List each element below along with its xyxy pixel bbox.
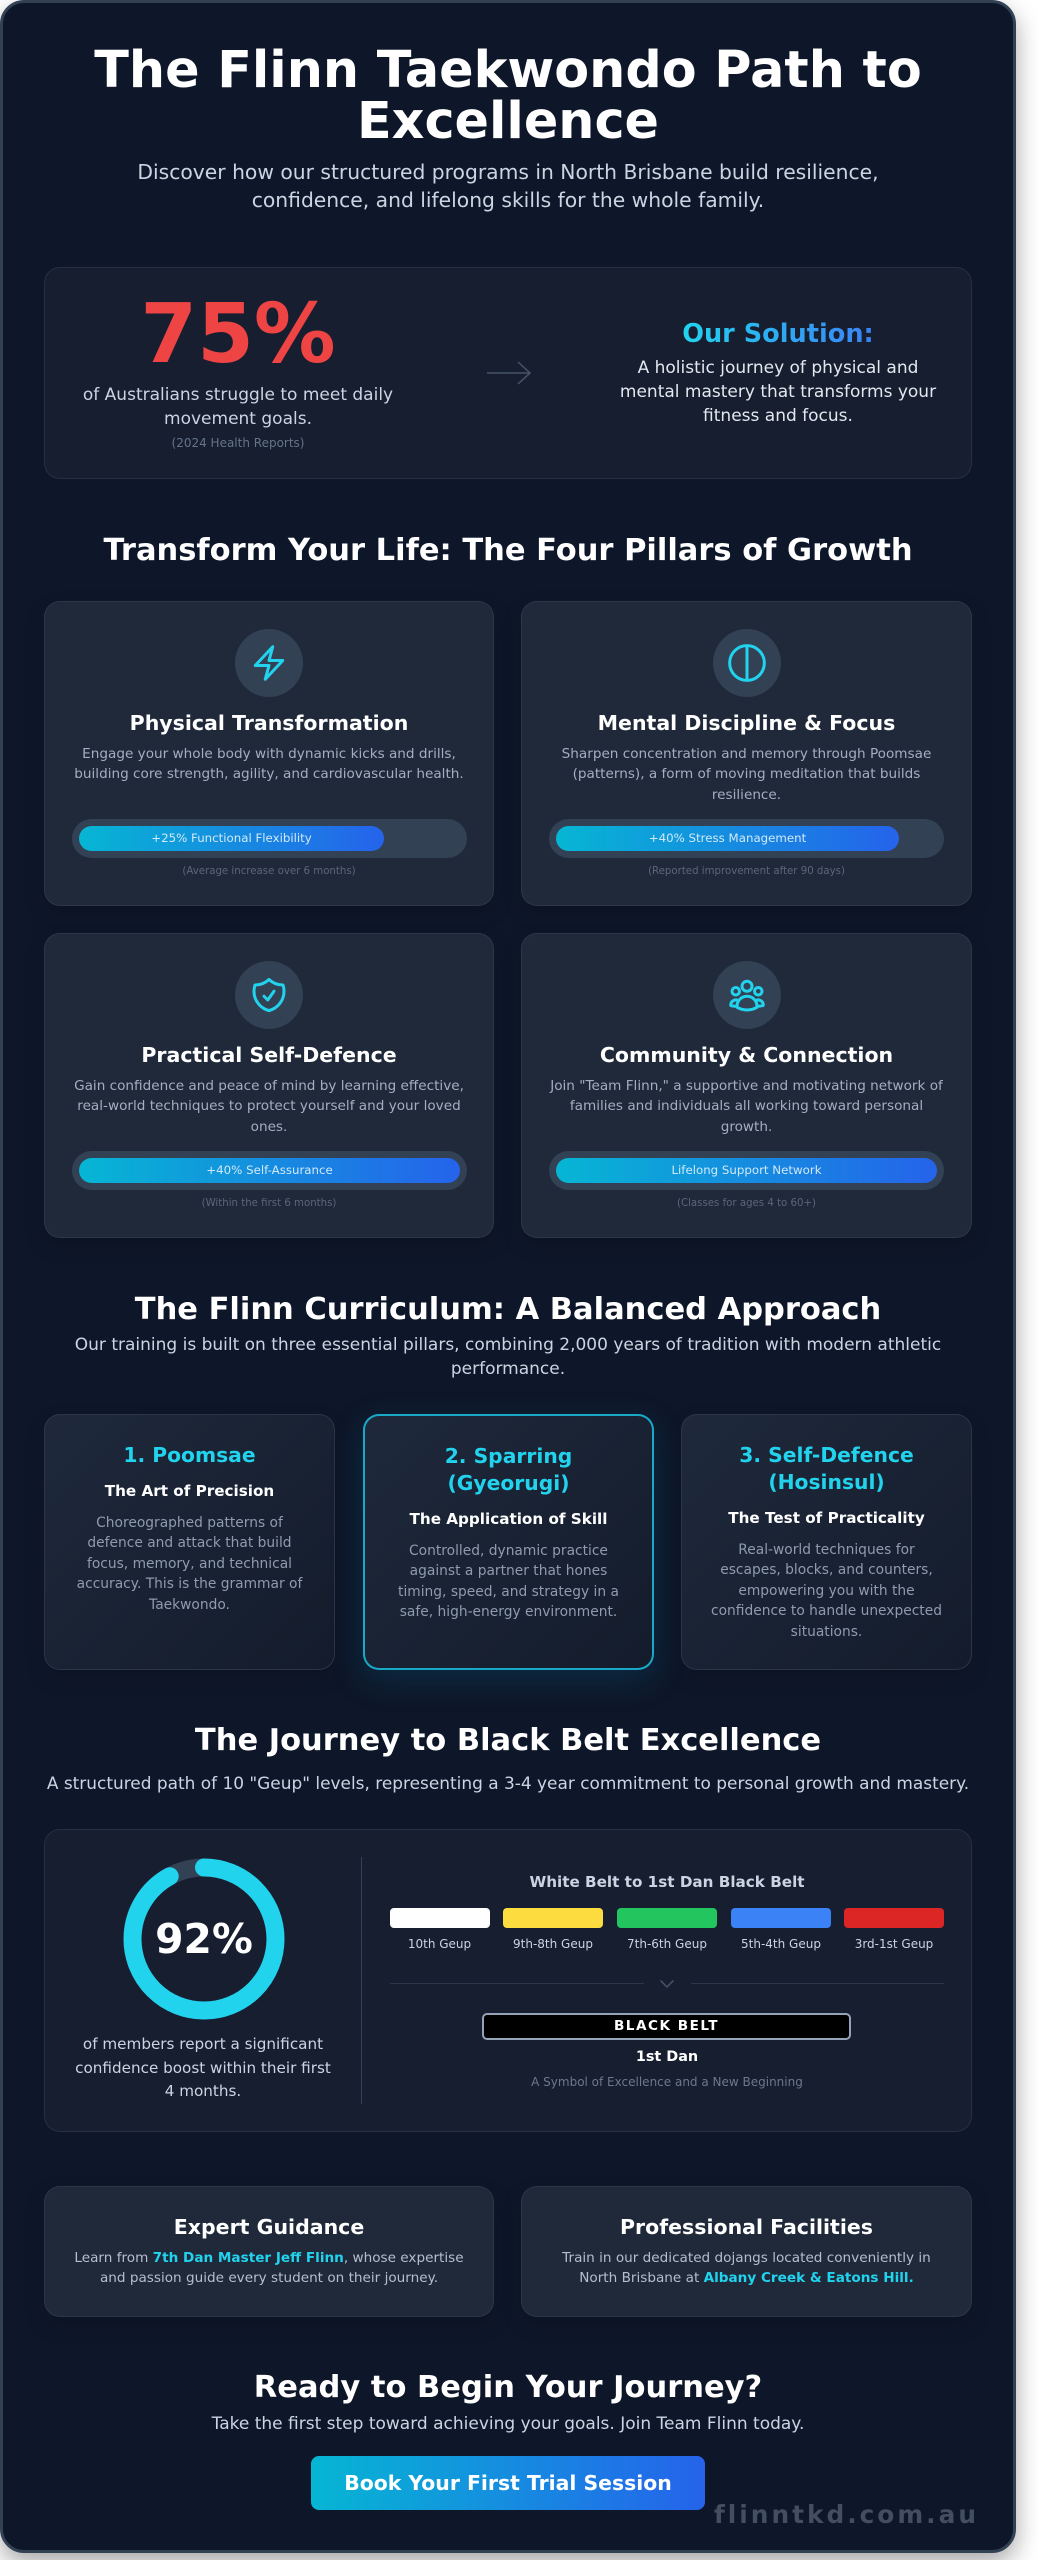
card text: and passion guide every student on their journey. bbox=[100, 2270, 438, 2286]
sparring heading bbox=[445, 1444, 572, 1495]
vertical divider bbox=[361, 1857, 362, 2104]
panel: community bbox=[521, 933, 972, 1238]
panel: professional facilities bbox=[521, 2186, 972, 2317]
poomsae text: defence and attack that build bbox=[87, 1535, 292, 1551]
panel: self-defence curriculum bbox=[681, 1414, 972, 1670]
call to action button: Book Your First Trial Session bbox=[344, 2471, 672, 2495]
hosinsul text: escapes, blocks, and counters, bbox=[720, 1562, 933, 1578]
card note: (Within the first 6 months) bbox=[202, 1198, 336, 1209]
watermark: flinntkd.com.au bbox=[714, 2500, 979, 2529]
card text bbox=[550, 1078, 944, 1135]
hosinsul text: Real-world techniques for bbox=[738, 1542, 915, 1558]
heading: curriculum: The Flinn Curriculum: A Balanced Approach bbox=[135, 1292, 881, 1327]
card text: Sharpen concentration and memory through Poomsae bbox=[562, 746, 931, 762]
panel: expert guidance bbox=[44, 2186, 494, 2317]
icon: split circle bbox=[712, 629, 780, 697]
sparring text: against a partner that hones bbox=[410, 1563, 607, 1579]
card text: building core strength, agility, and cardiovascular health. bbox=[74, 766, 464, 782]
black belt rank: 1st Dan bbox=[636, 2049, 698, 2065]
card note: (Classes for ages 4 to 60+) bbox=[677, 1198, 816, 1209]
belt: white bbox=[390, 1908, 490, 1928]
progress bar: flexibility: +25% Functional Flexibility bbox=[151, 831, 312, 845]
progress bar: support network: Lifelong Support Network bbox=[671, 1163, 822, 1177]
card text: (patterns), a form of moving meditation that builds bbox=[573, 766, 920, 782]
subtitle: Discover how our structured programs in North Brisbane build resilience, bbox=[137, 160, 879, 184]
panel: problem and solution bbox=[44, 267, 972, 479]
card text: Gain confidence and peace of mind by learning effective, bbox=[74, 1078, 464, 1094]
panel: physical transformation bbox=[44, 601, 494, 906]
solution description bbox=[620, 358, 936, 426]
donut chart: 92%: 92% bbox=[155, 1915, 253, 1963]
belt: yellow bbox=[503, 1908, 603, 1928]
card text: resilience. bbox=[712, 787, 781, 803]
progress bar: flexibility bbox=[72, 819, 467, 858]
card text bbox=[74, 746, 464, 782]
card text: Join "Team Flinn," a supportive and motivating network of bbox=[550, 1078, 943, 1094]
sparring subheading: The Application of Skill bbox=[410, 1510, 607, 1528]
card text: Train in our dedicated dojangs located conveniently in bbox=[562, 2250, 931, 2266]
icon: people bbox=[712, 961, 780, 1029]
poomsae text: focus, memory, and technical bbox=[87, 1556, 292, 1572]
poomsae text: Choreographed patterns of bbox=[96, 1515, 283, 1531]
call to action text: Take the first step toward achieving your goals. Join Team Flinn today. bbox=[212, 2414, 804, 2434]
curriculum intro bbox=[75, 1335, 941, 1378]
call to action heading: Ready to Begin Your Journey? bbox=[254, 2370, 762, 2405]
journey intro: A structured path of 10 "Geup" levels, representing a 3-4 year commitment to personal growth and mastery. bbox=[47, 1773, 969, 1793]
card title: Practical Self-Defence bbox=[141, 1043, 397, 1067]
poomsae text: Taekwondo. bbox=[149, 1597, 230, 1613]
panel: mental discipline bbox=[521, 601, 972, 906]
panel: self-defence bbox=[44, 933, 494, 1238]
label: 3rd-1st geup: 3rd-1st Geup bbox=[855, 1937, 933, 1951]
sparring text bbox=[398, 1543, 619, 1620]
donut chart: 92% bbox=[124, 1858, 284, 2020]
title bbox=[94, 40, 922, 150]
sparring heading: 2. Sparring bbox=[445, 1444, 572, 1468]
card text: real-world techniques to protect yourself and your loved bbox=[77, 1098, 461, 1114]
hosinsul subheading: The Test of Practicality bbox=[728, 1509, 925, 1527]
black belt bbox=[482, 2013, 851, 2040]
label: 5th-4th geup: 5th-4th Geup bbox=[741, 1937, 821, 1951]
heading: journey: The Journey to Black Belt Excellence bbox=[195, 1723, 821, 1758]
panel: journey bbox=[44, 1829, 972, 2132]
heading: four pillars: Transform Your Life: The Four Pillars of Growth bbox=[103, 533, 913, 568]
belt: blue bbox=[731, 1908, 831, 1928]
card title: Expert Guidance bbox=[174, 2215, 364, 2239]
icon: arrow bbox=[487, 362, 531, 384]
card text bbox=[562, 2250, 931, 2286]
hosinsul text: situations. bbox=[791, 1624, 862, 1640]
curriculum intro: performance. bbox=[451, 1358, 565, 1378]
hosinsul text bbox=[711, 1542, 942, 1640]
subtitle: confidence, and lifelong skills for the whole family. bbox=[252, 188, 764, 212]
hosinsul text: confidence to handle unexpected bbox=[711, 1603, 942, 1619]
label: 7th-6th geup: 7th-6th Geup bbox=[627, 1937, 707, 1951]
donut caption: 4 months. bbox=[165, 2082, 241, 2100]
belt: green bbox=[617, 1908, 717, 1928]
icon: chevron bbox=[660, 1980, 674, 1988]
card title: Physical Transformation bbox=[130, 711, 408, 735]
sparring text: timing, speed, and strategy in a bbox=[398, 1584, 619, 1600]
progress bar: self-assurance: +40% Self-Assurance bbox=[206, 1163, 333, 1177]
title: The Flinn Taekwondo Path to bbox=[94, 40, 922, 99]
card text: families and individuals all working toward personal bbox=[570, 1098, 923, 1114]
hosinsul heading bbox=[739, 1442, 914, 1494]
poomsae text: accuracy. This is the grammar of bbox=[77, 1576, 302, 1592]
curriculum intro: Our training is built on three essential pillars, combining 2,000 years of tradition with modern athletic bbox=[75, 1335, 941, 1355]
card title: Professional Facilities bbox=[620, 2215, 873, 2239]
card text: North Brisbane at Albany Creek & Eatons Hill. bbox=[579, 2270, 914, 2286]
label: 9th-8th geup: 9th-8th Geup bbox=[513, 1937, 593, 1951]
card text bbox=[74, 1078, 464, 1135]
card title: Community & Connection bbox=[600, 1043, 893, 1067]
statistic description bbox=[83, 385, 393, 429]
card title: Mental Discipline & Focus bbox=[598, 711, 895, 735]
progress bar: stress bbox=[549, 819, 944, 858]
card text bbox=[562, 746, 931, 803]
hosinsul heading: (Hosinsul) bbox=[768, 1470, 885, 1494]
card text: Engage your whole body with dynamic kicks and drills, bbox=[82, 746, 456, 762]
card note: (Reported improvement after 90 days) bbox=[648, 866, 845, 877]
progress bar: support network bbox=[549, 1151, 944, 1190]
hosinsul heading: 3. Self-Defence bbox=[739, 1442, 914, 1466]
statistic source: (2024 Health Reports) bbox=[172, 436, 304, 450]
panel: poomsae bbox=[44, 1414, 335, 1670]
solution description: A holistic journey of physical and bbox=[638, 358, 918, 378]
poomsae heading: 1. Poomsae bbox=[123, 1442, 256, 1466]
card text bbox=[74, 2250, 464, 2286]
icon: shield bbox=[235, 961, 303, 1029]
card text: growth. bbox=[721, 1119, 772, 1135]
sparring text: Controlled, dynamic practice bbox=[409, 1543, 608, 1559]
sparring text: safe, high-energy environment. bbox=[400, 1604, 617, 1620]
donut caption bbox=[75, 2035, 331, 2100]
solution description: fitness and focus. bbox=[703, 406, 853, 426]
card text: Learn from 7th Dan Master Jeff Flinn, whose expertise bbox=[74, 2250, 464, 2266]
card text: ones. bbox=[251, 1119, 287, 1135]
belt: red bbox=[844, 1908, 944, 1928]
donut caption: of members report a significant bbox=[83, 2035, 323, 2053]
progress bar: stress: +40% Stress Management bbox=[649, 831, 806, 845]
hosinsul text: empowering you with the bbox=[738, 1583, 915, 1599]
subtitle bbox=[137, 160, 879, 212]
black belt caption: A Symbol of Excellence and a New Beginning bbox=[531, 2075, 803, 2089]
card note: (Average increase over 6 months) bbox=[182, 866, 356, 877]
poomsae subheading: The Art of Precision bbox=[105, 1482, 274, 1500]
solution description: mental mastery that transforms your bbox=[620, 382, 936, 402]
call to action button bbox=[311, 2456, 705, 2510]
icon: bolt bbox=[235, 629, 303, 697]
title: Excellence bbox=[357, 91, 659, 150]
statistic: 75%: 75% bbox=[140, 287, 336, 382]
belt progression heading: White Belt to 1st Dan Black Belt bbox=[529, 1873, 805, 1891]
sparring heading: (Gyeorugi) bbox=[447, 1471, 570, 1495]
donut caption: confidence boost within their first bbox=[75, 2059, 331, 2077]
label: 10th geup: 10th Geup bbox=[408, 1937, 471, 1951]
panel: sparring bbox=[363, 1414, 654, 1670]
black belt: BLACK BELT bbox=[614, 2018, 719, 2034]
statistic description: of Australians struggle to meet daily bbox=[83, 385, 393, 405]
statistic description: movement goals. bbox=[164, 409, 312, 429]
progress bar: self-assurance bbox=[72, 1151, 467, 1190]
poomsae text bbox=[77, 1515, 303, 1613]
solution heading: Our Solution: bbox=[682, 319, 874, 349]
